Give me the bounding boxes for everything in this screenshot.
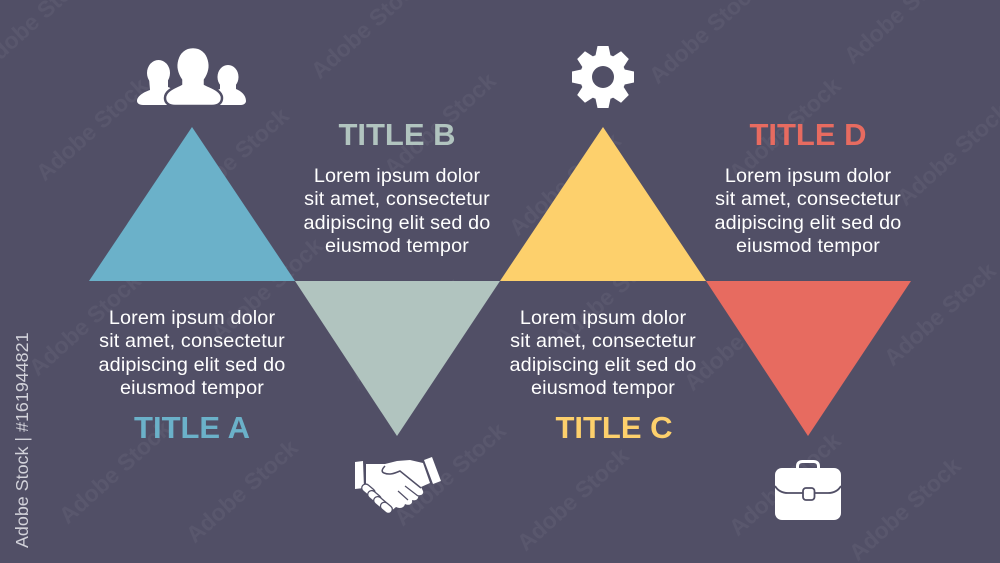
title C: TITLE C <box>555 410 673 445</box>
watermarks: Adobe Stock <box>54 415 176 529</box>
text block D: sit amet, consectetur <box>715 188 901 210</box>
title A: TITLE A <box>134 410 250 445</box>
watermarks: Adobe Stock <box>724 72 846 186</box>
text block B: eiusmod tempor <box>325 235 469 257</box>
icon: gear <box>572 46 634 108</box>
title D: TITLE D <box>749 117 867 152</box>
triangle C <box>500 127 706 281</box>
text block A: sit amet, consectetur <box>99 330 285 352</box>
watermarks: Adobe Stock <box>679 282 801 396</box>
text block B: adipiscing elit sed do <box>304 212 490 234</box>
watermarks: Adobe Stock <box>206 232 328 346</box>
text block C: adipiscing elit sed do <box>510 354 696 376</box>
icon: briefcase <box>775 462 841 520</box>
text block D <box>715 165 901 257</box>
stock credit: Adobe Stock | #161944821 <box>12 332 32 548</box>
watermarks: Adobe Stock <box>31 72 153 186</box>
watermarks: Adobe Stock <box>512 442 634 556</box>
icon: people <box>137 47 246 106</box>
text block D: eiusmod tempor <box>736 235 880 257</box>
triangle D <box>706 281 911 436</box>
watermarks: Adobe Stock <box>344 272 466 386</box>
watermarks: Adobe Stock <box>879 257 1000 371</box>
watermarks: Adobe Stock <box>172 102 294 216</box>
watermarks: Adobe Stock <box>504 127 626 241</box>
icon: handshake <box>355 457 441 515</box>
text block A: adipiscing elit sed do <box>99 354 285 376</box>
title B: TITLE B <box>338 117 456 152</box>
text block C: sit amet, consectetur <box>510 330 696 352</box>
text block D: adipiscing elit sed do <box>715 212 901 234</box>
watermarks: Adobe Stock <box>24 267 146 381</box>
text block A: eiusmod tempor <box>120 377 264 399</box>
text block B: sit amet, consectetur <box>304 188 490 210</box>
watermarks: Adobe Stock <box>549 237 671 351</box>
triangle B <box>295 281 500 436</box>
text block B: Lorem ipsum dolor <box>314 165 480 187</box>
text block C <box>510 307 696 399</box>
text block A <box>99 307 285 399</box>
triangle A <box>89 127 295 281</box>
text block D: Lorem ipsum dolor <box>725 165 891 187</box>
watermarks: Adobe Stock <box>389 417 511 531</box>
watermarks: Adobe Stock <box>844 452 966 563</box>
watermarks: Adobe Stock <box>379 67 501 181</box>
watermarks: Adobe Stock <box>181 434 303 548</box>
text block B <box>304 165 490 257</box>
text block C: eiusmod tempor <box>531 377 675 399</box>
text block A: Lorem ipsum dolor <box>109 307 275 329</box>
text block C: Lorem ipsum dolor <box>520 307 686 329</box>
watermarks: Adobe Stock <box>724 427 846 541</box>
